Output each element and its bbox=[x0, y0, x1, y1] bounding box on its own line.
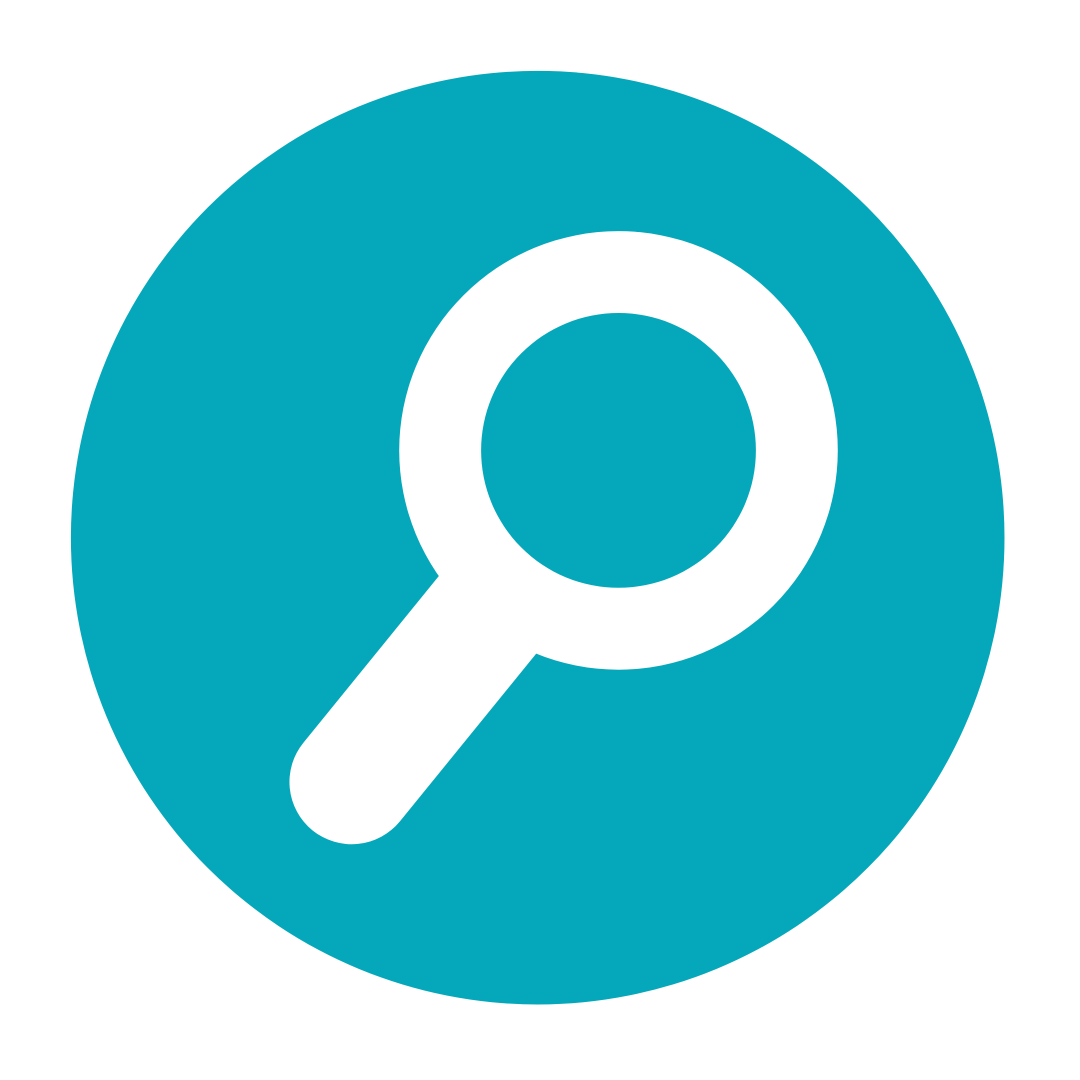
lens ring bbox=[399, 231, 838, 670]
handle bbox=[352, 549, 541, 782]
lens interior bbox=[481, 313, 756, 588]
teal circle background bbox=[71, 71, 1004, 1004]
magnifying glass bbox=[352, 231, 838, 782]
